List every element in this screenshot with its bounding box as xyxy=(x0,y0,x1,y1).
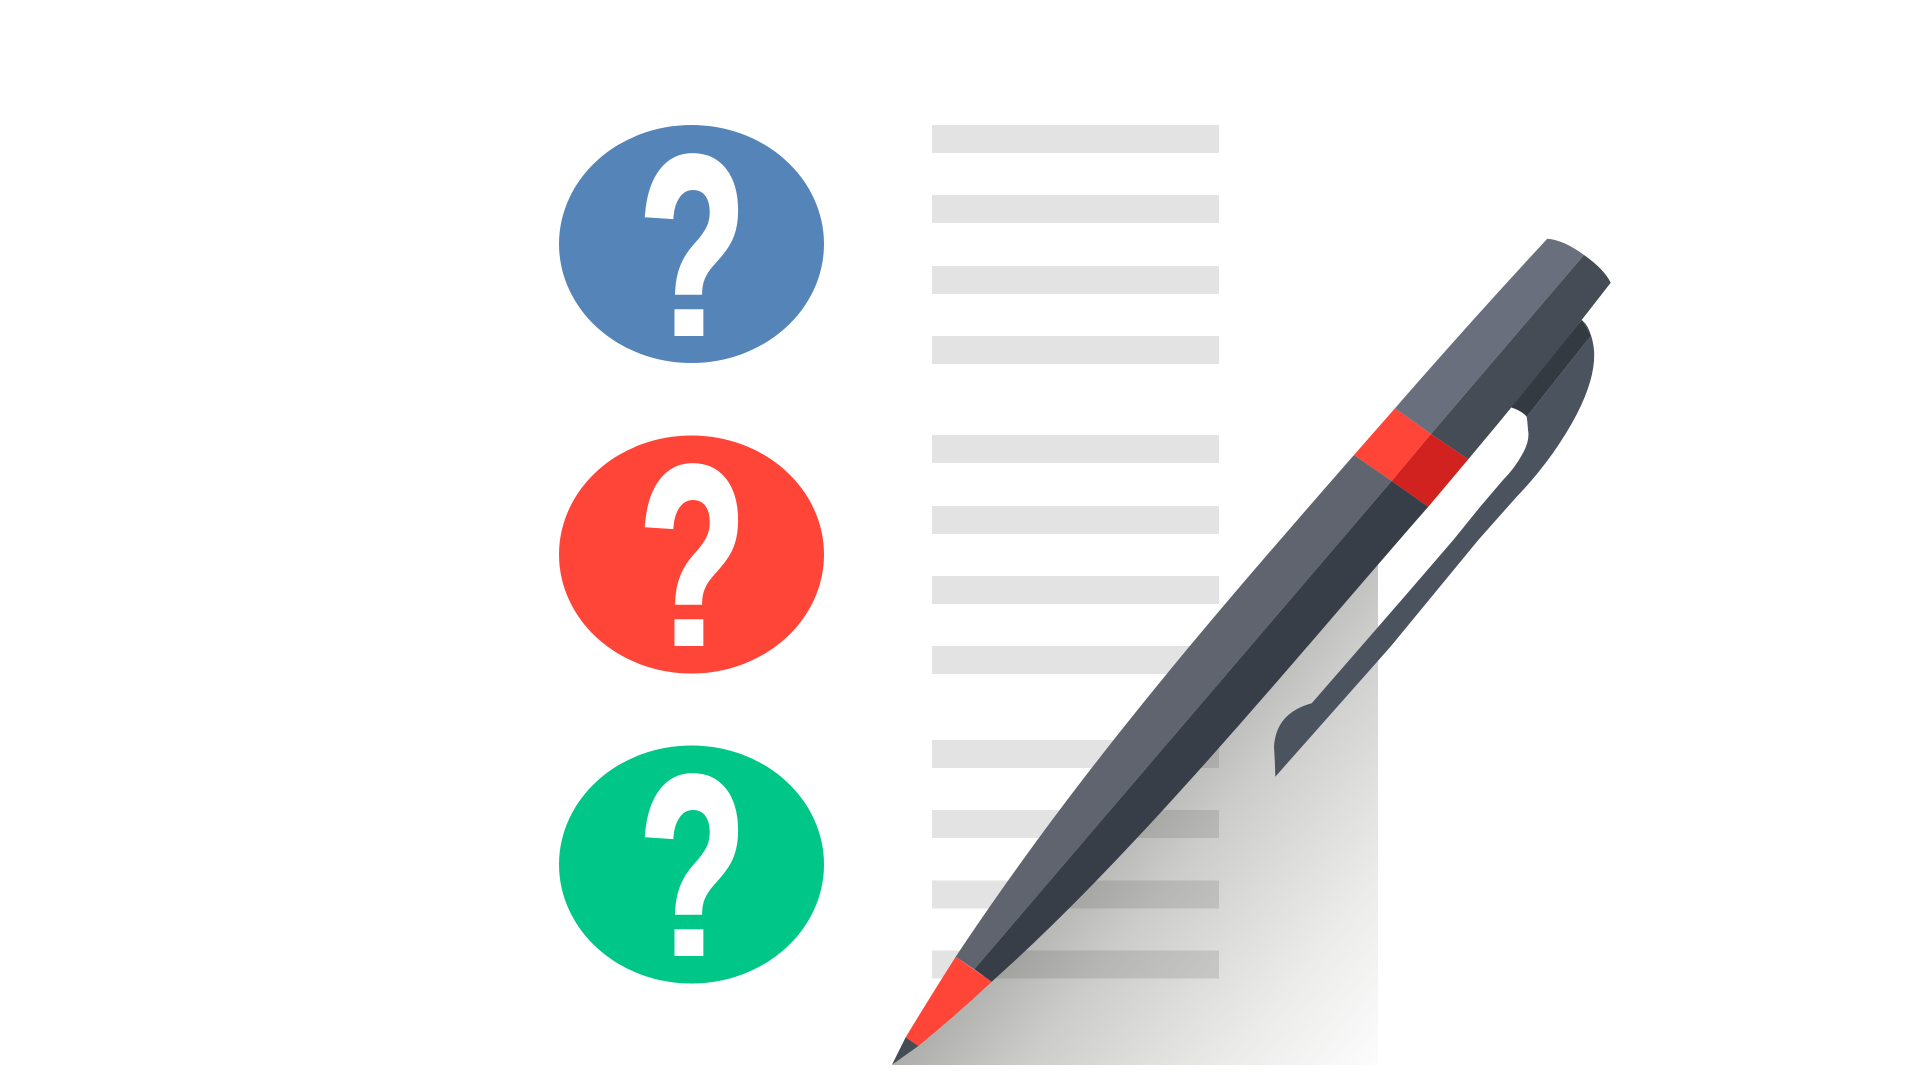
question mark: ? xyxy=(639,409,746,717)
pen drop shadow xyxy=(892,550,1378,1065)
pen red grip xyxy=(906,957,992,1046)
answer lines group 3 xyxy=(932,740,1219,978)
pen red band light xyxy=(1354,408,1431,481)
question group 1: blue badge xyxy=(559,125,824,363)
pen clip xyxy=(1274,320,1594,777)
pen clip dark top xyxy=(1511,320,1591,417)
question group 2: red badge xyxy=(559,436,824,674)
question mark: ? xyxy=(639,99,746,407)
answer lines group 2 xyxy=(932,435,1219,674)
question mark: ? xyxy=(639,719,746,1027)
pen barrel upper light xyxy=(1395,239,1584,434)
pen barrel upper dark xyxy=(1431,255,1611,459)
red ellipse xyxy=(559,436,824,674)
questionnaire illustration xyxy=(559,125,1611,1065)
question group 3: green badge xyxy=(559,746,824,984)
answer lines group 1 xyxy=(932,125,1219,364)
pen nib xyxy=(892,1037,918,1065)
pen xyxy=(892,239,1611,1065)
blue ellipse xyxy=(559,125,824,363)
green ellipse xyxy=(559,746,824,984)
pen barrel lower light xyxy=(956,455,1392,969)
pen barrel lower dark xyxy=(974,481,1428,982)
pen red band dark xyxy=(1392,434,1468,507)
